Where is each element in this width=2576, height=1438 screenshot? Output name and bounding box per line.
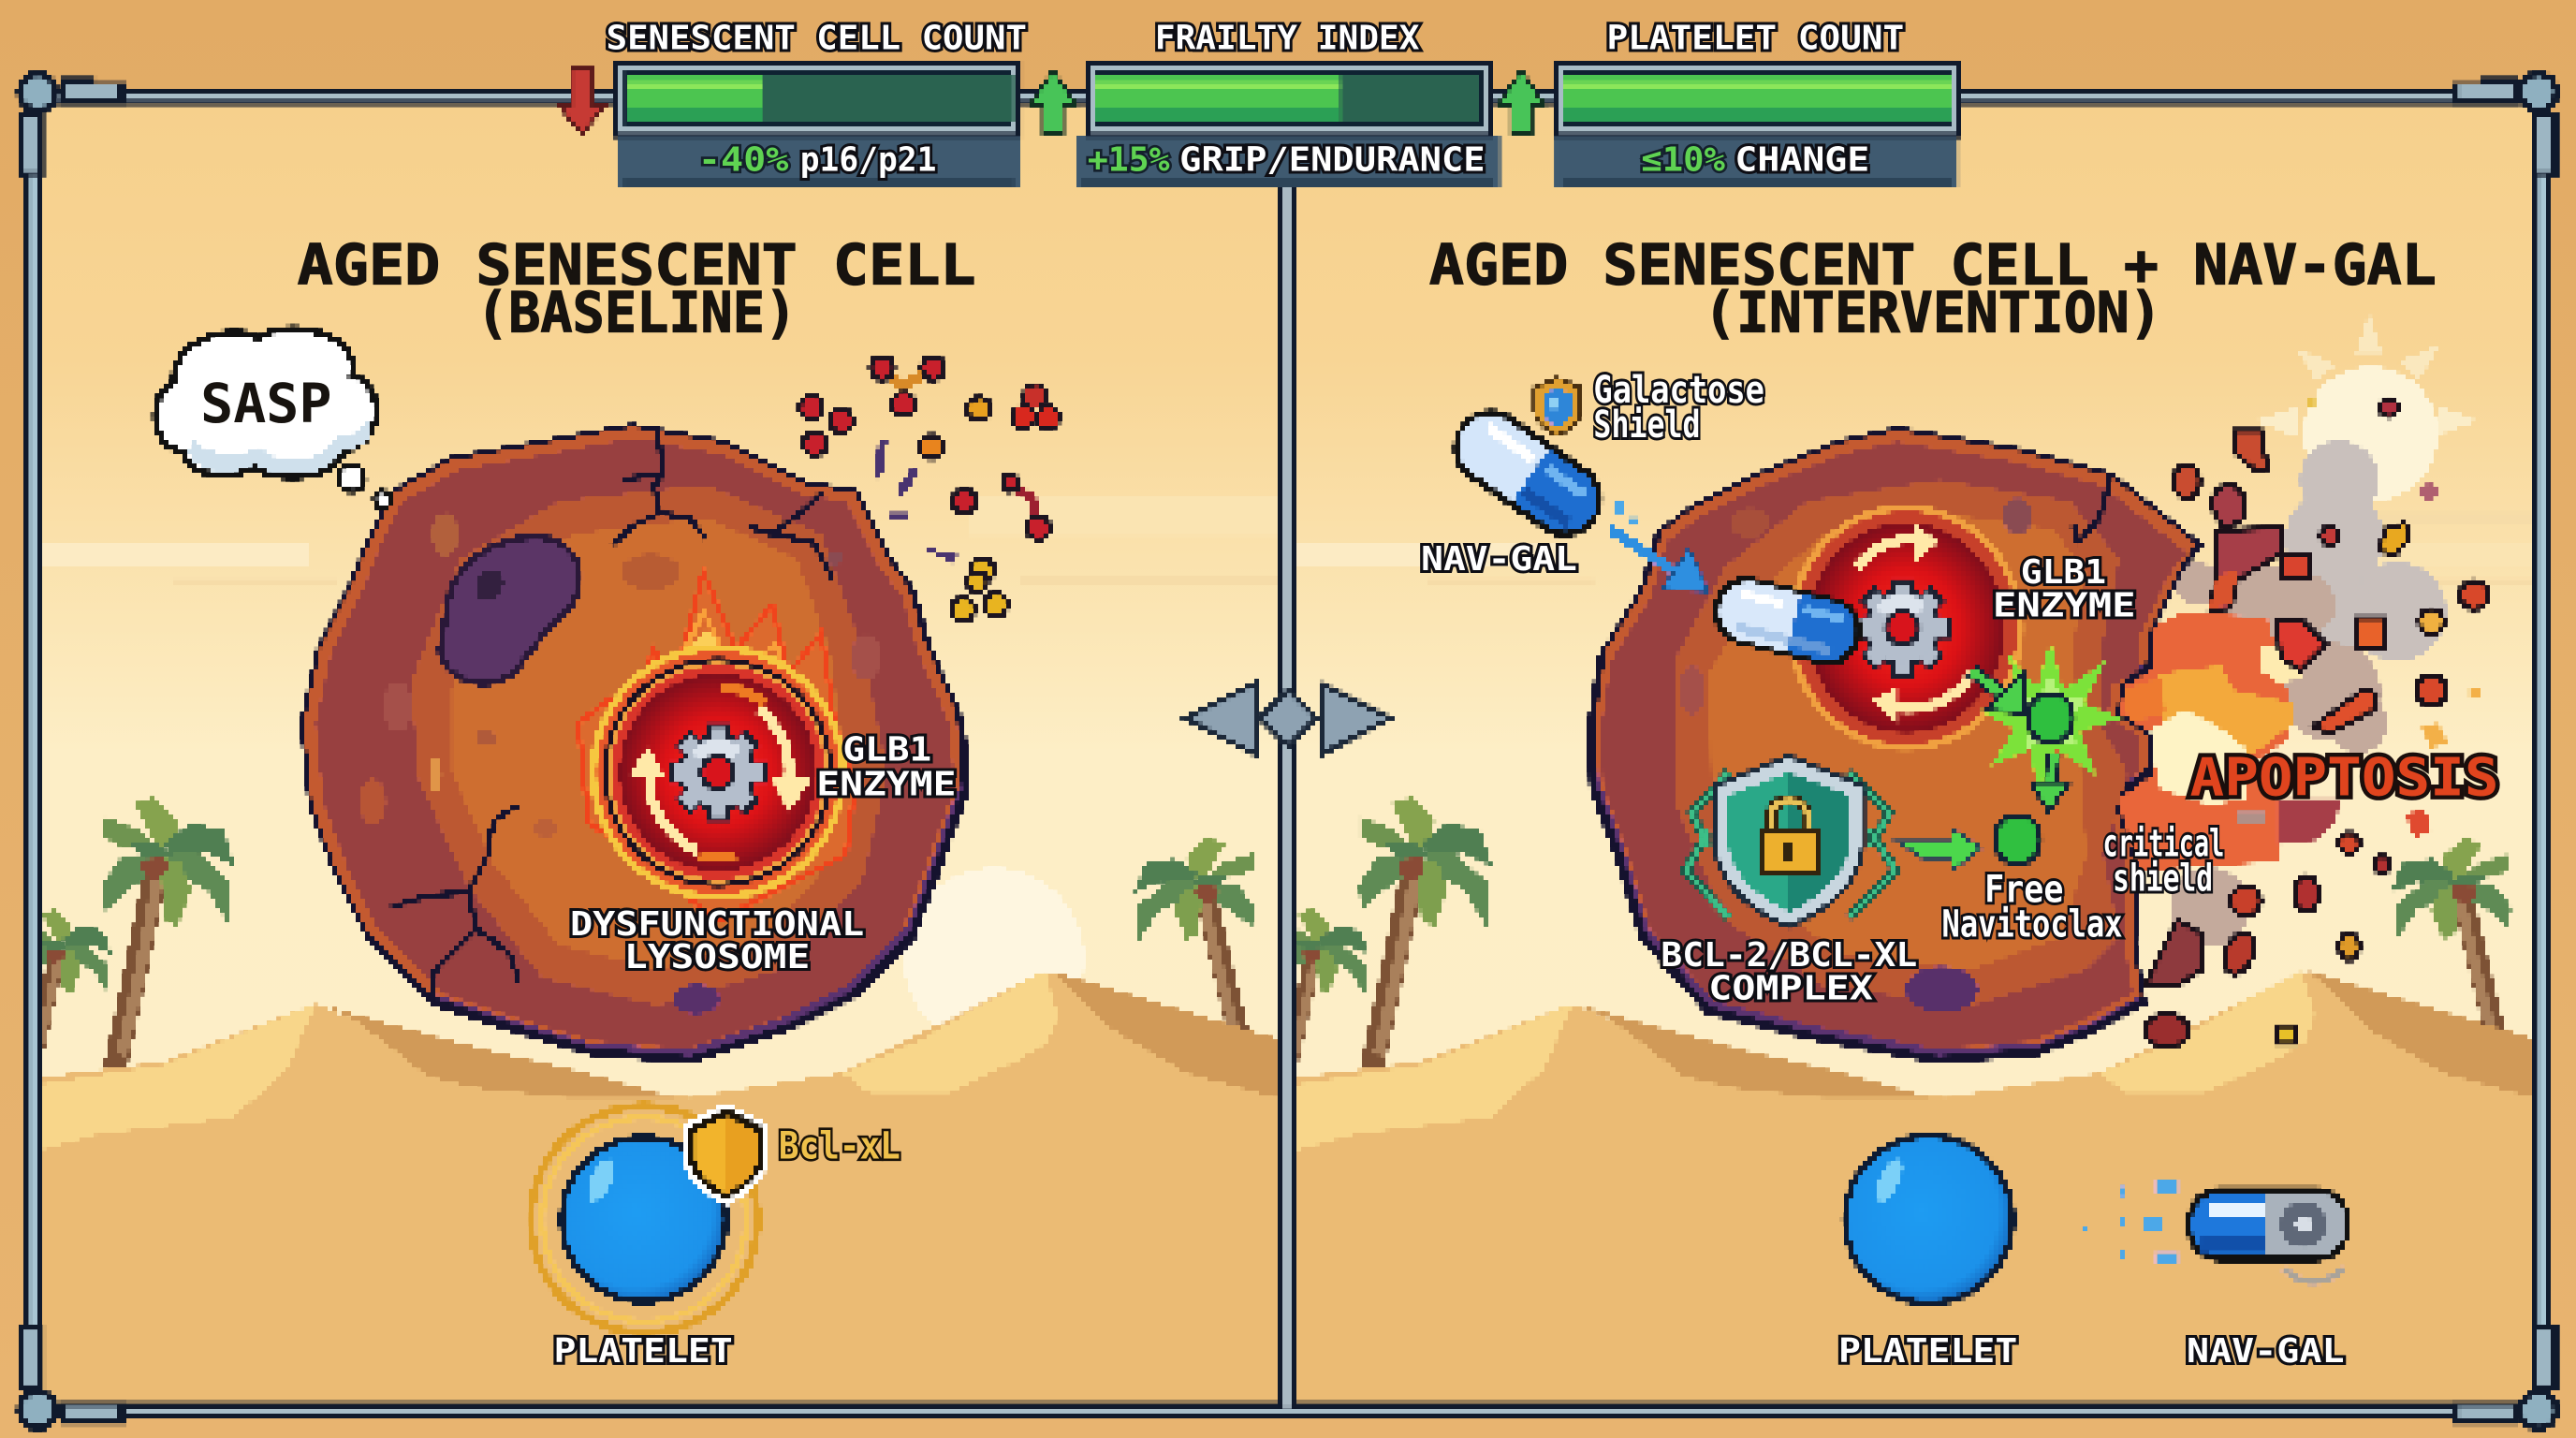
HUD values: -40%	[698, 141, 789, 180]
desert backdrop right	[1275, 313, 2537, 1405]
nucleus	[440, 537, 579, 683]
HUD values: CHANGE	[1734, 141, 1869, 180]
left senescent cell	[299, 418, 966, 1060]
label: left GLB1 enzyme: GLB1	[842, 731, 931, 770]
HUD titles: PLATELET COUNT	[1606, 20, 1904, 58]
purple debris streaks	[874, 437, 959, 564]
loose sparks	[2306, 400, 2479, 838]
label: critical shield: critical	[2103, 822, 2224, 866]
arrow lysosome to burst	[1971, 670, 2024, 713]
right platelet	[1841, 1132, 2016, 1307]
HUD titles	[607, 20, 1904, 58]
label: galactose shield: Galactose	[1593, 368, 1764, 412]
HUD bar: frailty index	[1076, 59, 1500, 187]
arrow burst to free navitoclax	[2030, 753, 2070, 812]
HUD values: +15%	[1088, 141, 1170, 180]
label: galactose shield: Shield	[1593, 403, 1701, 447]
label: SASP: SASP	[200, 372, 332, 435]
sun with rays	[2254, 313, 2478, 501]
cracks	[391, 431, 833, 1003]
desert backdrop left	[19, 496, 1278, 1405]
label: left platelet: PLATELET	[553, 1332, 733, 1371]
heading: baseline: (BASELINE)	[476, 282, 797, 346]
nav-gal pill with enzyme	[2083, 1180, 2349, 1282]
left lysosome with flames	[578, 572, 855, 920]
right senescent cell	[1590, 420, 2203, 1060]
galactose shield icon	[1534, 378, 1580, 435]
right lysosome	[1788, 505, 2024, 751]
label: BCL complex: COMPLEX	[1708, 969, 1873, 1007]
blue arrow with particles	[1610, 501, 1708, 592]
label: dysfunctional lysosome: DYSFUNCTIONAL	[570, 905, 864, 944]
HUD bar: platelet count	[1553, 59, 1962, 187]
label: free navitoclax	[1942, 868, 2123, 946]
label: critical shield	[2103, 822, 2224, 900]
label: BCL complex: BCL-2/BCL-XL	[1661, 936, 1917, 975]
label: galactose shield	[1593, 368, 1764, 447]
HUD arrows	[559, 69, 1544, 133]
label: right GLB1 enzyme	[1993, 553, 2136, 624]
right explosion	[2106, 440, 2446, 946]
left platelet with ring	[531, 1106, 757, 1333]
SASP thought bubble	[155, 329, 391, 507]
arrow complex to navitoclax	[1897, 829, 1982, 871]
SASP molecules	[800, 357, 1060, 622]
label: dysfunctional lysosome: LYSOSOME	[624, 938, 810, 976]
Bcl-xL shield	[683, 1103, 768, 1206]
label: free navitoclax: Navitoclax	[1942, 902, 2123, 946]
NAV-GAL capsule	[1439, 395, 1617, 551]
label: apoptosis: APOPTOSIS	[2190, 748, 2499, 809]
label: critical shield: shield	[2113, 856, 2213, 900]
label: BCL complex	[1661, 936, 1917, 1007]
label: right GLB1 enzyme: GLB1	[2021, 553, 2106, 592]
cell spots	[359, 513, 881, 1014]
label: left GLB1 enzyme	[816, 731, 956, 804]
HUD values: ≤10%	[1641, 141, 1725, 180]
label: NAV-GAL pill bottom: NAV-GAL	[2187, 1332, 2345, 1371]
free navitoclax ball	[1995, 815, 2041, 864]
debris chunks near explosion	[2145, 399, 2488, 1047]
HUD titles: FRAILTY INDEX	[1155, 20, 1420, 58]
label: right GLB1 enzyme: ENZYME	[1993, 586, 2136, 624]
comparison arrows	[1186, 683, 1390, 755]
HUD bar: senescent cell count	[614, 59, 1022, 187]
label: right platelet: PLATELET	[1838, 1332, 2017, 1371]
label: free navitoclax: Free	[1984, 868, 2063, 912]
center divider	[1278, 181, 1298, 1407]
green burst released navitoclax	[1980, 641, 2123, 792]
heading: baseline: AGED SENESCENT CELL	[298, 234, 976, 299]
BCL-2 complex shield with lock	[1686, 756, 1895, 927]
HUD values	[698, 141, 1869, 180]
heading: intervention: AGED SENESCENT CELL + NAV-GAL	[1429, 234, 2437, 299]
heading: intervention: (INTERVENTION)	[1704, 282, 2162, 346]
label: left GLB1 enzyme: ENZYME	[816, 766, 956, 804]
label: Bcl-xL: Bcl-xL	[779, 1124, 900, 1168]
HUD titles: SENESCENT CELL COUNT	[607, 20, 1027, 58]
label: NAV-GAL capsule: NAV-GAL	[1421, 540, 1577, 579]
heading: baseline	[298, 234, 976, 346]
heading: intervention	[1429, 234, 2437, 346]
HUD values: p16/p21	[800, 141, 936, 180]
label: dysfunctional lysosome	[570, 905, 864, 976]
pill docked in lysosome	[1705, 569, 1869, 673]
HUD values: GRIP/ENDURANCE	[1179, 141, 1486, 180]
